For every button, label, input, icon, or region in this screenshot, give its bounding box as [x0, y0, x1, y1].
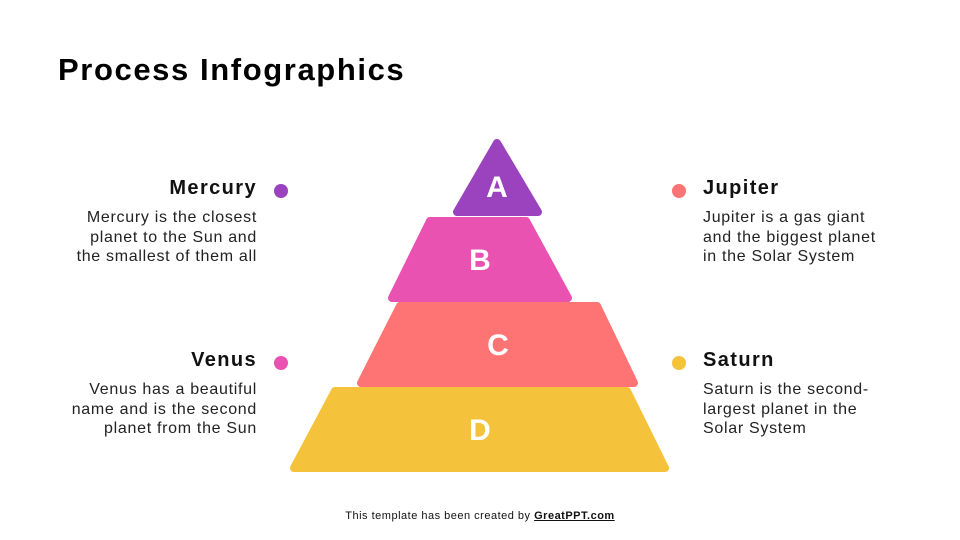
- layer C: C: [487, 329, 509, 362]
- layer D: [294, 391, 665, 468]
- block: saturn: largest planet in the: [703, 400, 857, 418]
- layer B: [392, 221, 568, 298]
- footer: This template has been created by GreatPPT.com: [345, 510, 615, 522]
- layer B: B: [469, 244, 491, 277]
- layer A: [457, 143, 538, 212]
- block: saturn: Saturn: [703, 349, 775, 371]
- block: venus: [72, 349, 257, 437]
- block: jupiter: [703, 177, 876, 265]
- block: venus: Venus has a beautiful: [89, 381, 257, 398]
- layer D: D: [469, 414, 491, 447]
- block: mercury: the smallest of them all: [77, 248, 257, 265]
- block: venus: name and is the second: [72, 400, 257, 418]
- block: mercury: [76, 177, 257, 265]
- block: saturn: Solar System: [703, 420, 807, 437]
- block: jupiter: Jupiter: [703, 177, 779, 199]
- layer A: A: [486, 171, 508, 204]
- block: venus: Venus: [191, 349, 257, 371]
- block: jupiter: Jupiter is a gas giant: [703, 209, 865, 226]
- layer C: [361, 306, 634, 383]
- dot: jupiter: [672, 184, 686, 198]
- block: mercury: planet to the Sun and: [90, 228, 257, 246]
- dot: venus: [274, 356, 288, 370]
- block: mercury: Mercury: [169, 177, 257, 199]
- block: saturn: [703, 349, 869, 437]
- title: Process Infographics: [58, 52, 405, 87]
- block: jupiter: and the biggest planet: [703, 228, 876, 246]
- block: venus: planet from the Sun: [104, 420, 257, 437]
- dot: mercury: [274, 184, 288, 198]
- block: jupiter: in the Solar System: [703, 248, 855, 265]
- block: saturn: Saturn is the second-: [703, 381, 869, 398]
- block: mercury: Mercury is the closest: [87, 209, 257, 226]
- dot: saturn: [672, 356, 686, 370]
